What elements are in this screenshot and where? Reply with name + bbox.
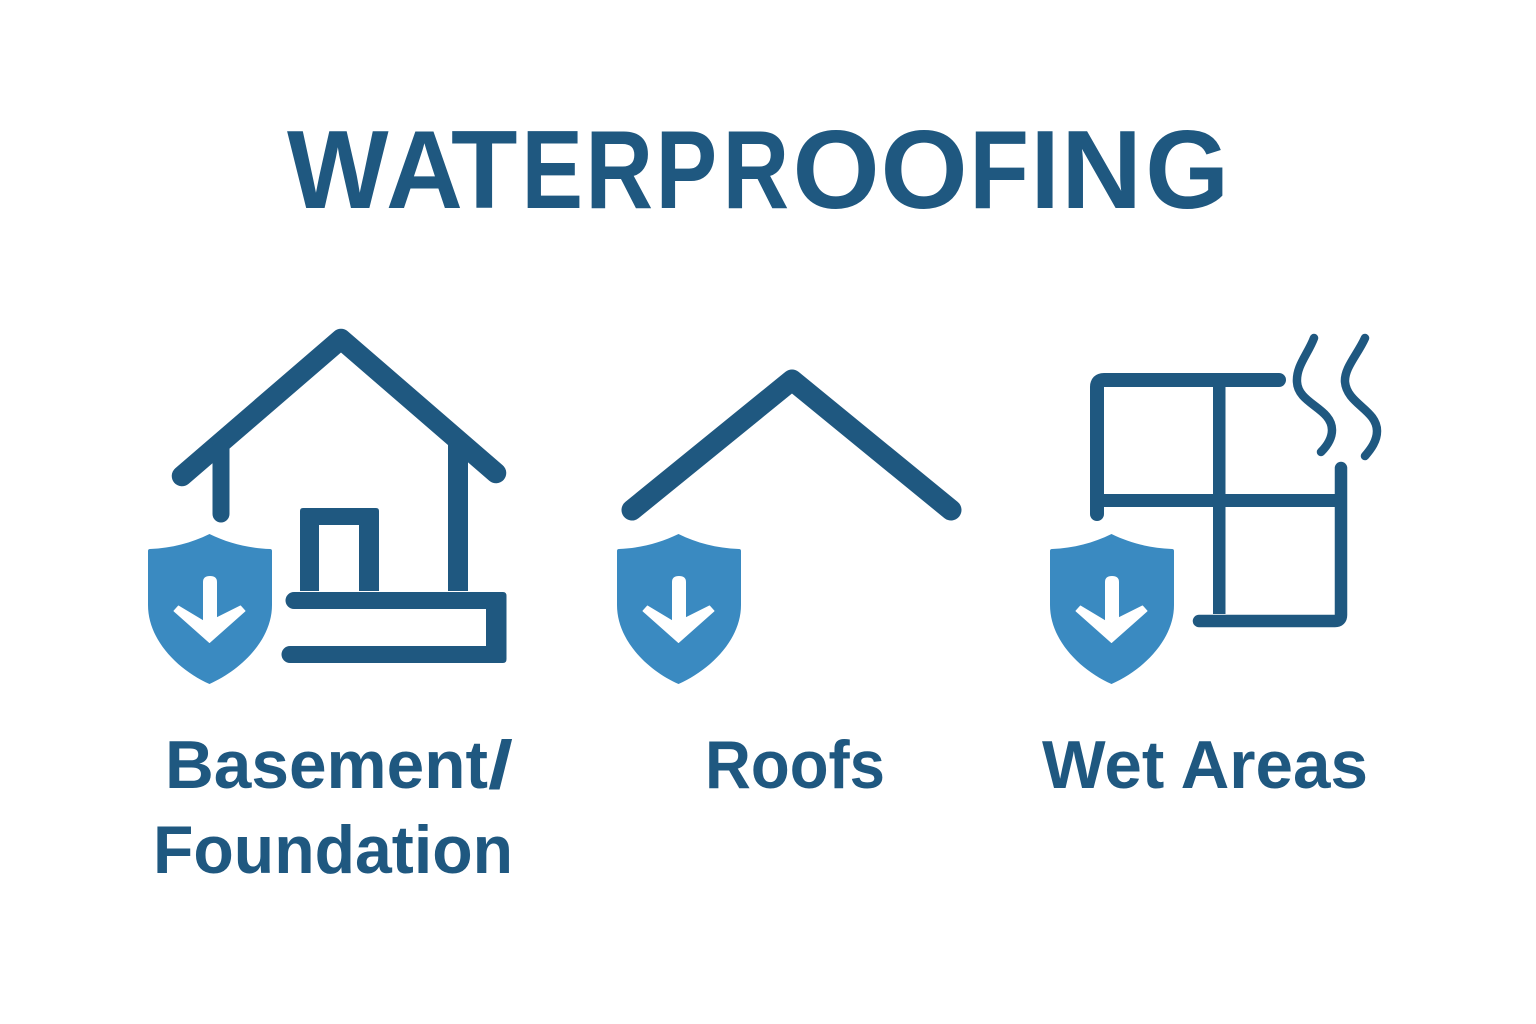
label: Basement/Foundation: Basement bbox=[165, 727, 488, 803]
title: P bbox=[656, 108, 717, 232]
label: Basement/Foundation: / bbox=[488, 727, 513, 803]
panel: wet areas bbox=[1042, 338, 1377, 803]
icon: tiled wall bbox=[1097, 380, 1341, 621]
title: W bbox=[287, 108, 389, 232]
house left wall bbox=[212, 445, 230, 514]
title: O bbox=[792, 108, 880, 232]
door bbox=[300, 508, 379, 591]
title: G bbox=[1145, 108, 1229, 232]
icon: shield with down arrow bbox=[617, 534, 741, 684]
title: F bbox=[969, 108, 1029, 232]
label: Roofs: Roofs bbox=[705, 727, 885, 803]
icon: steam bbox=[1297, 338, 1377, 456]
icon: house with foundation bbox=[182, 339, 506, 663]
tile centre vertical bbox=[1213, 384, 1226, 614]
panel: roofs bbox=[617, 380, 951, 803]
house roof bbox=[182, 339, 496, 476]
title: R bbox=[723, 108, 789, 232]
title: I bbox=[1031, 108, 1060, 232]
tile centre horizontal bbox=[1100, 494, 1340, 507]
title: O bbox=[880, 108, 968, 232]
icon: shield with down arrow bbox=[1050, 534, 1174, 684]
foundation slab bbox=[282, 592, 506, 663]
tile outline lower right bbox=[1199, 468, 1341, 621]
label: Basement/Foundation bbox=[153, 727, 513, 888]
title: N bbox=[1061, 108, 1142, 232]
house right wall bbox=[448, 440, 468, 591]
title: A bbox=[386, 108, 463, 232]
title: T bbox=[451, 108, 518, 232]
label: Basement/Foundation: Foundation bbox=[153, 812, 513, 888]
title: E bbox=[522, 108, 583, 232]
title: R bbox=[585, 108, 653, 232]
panel: basement / foundation bbox=[148, 339, 513, 888]
label: Wet Areas: Wet Areas bbox=[1042, 727, 1368, 803]
icon: shield with down arrow bbox=[148, 534, 272, 684]
tile outline upper left bbox=[1097, 380, 1279, 514]
icon: roof bbox=[632, 380, 951, 510]
